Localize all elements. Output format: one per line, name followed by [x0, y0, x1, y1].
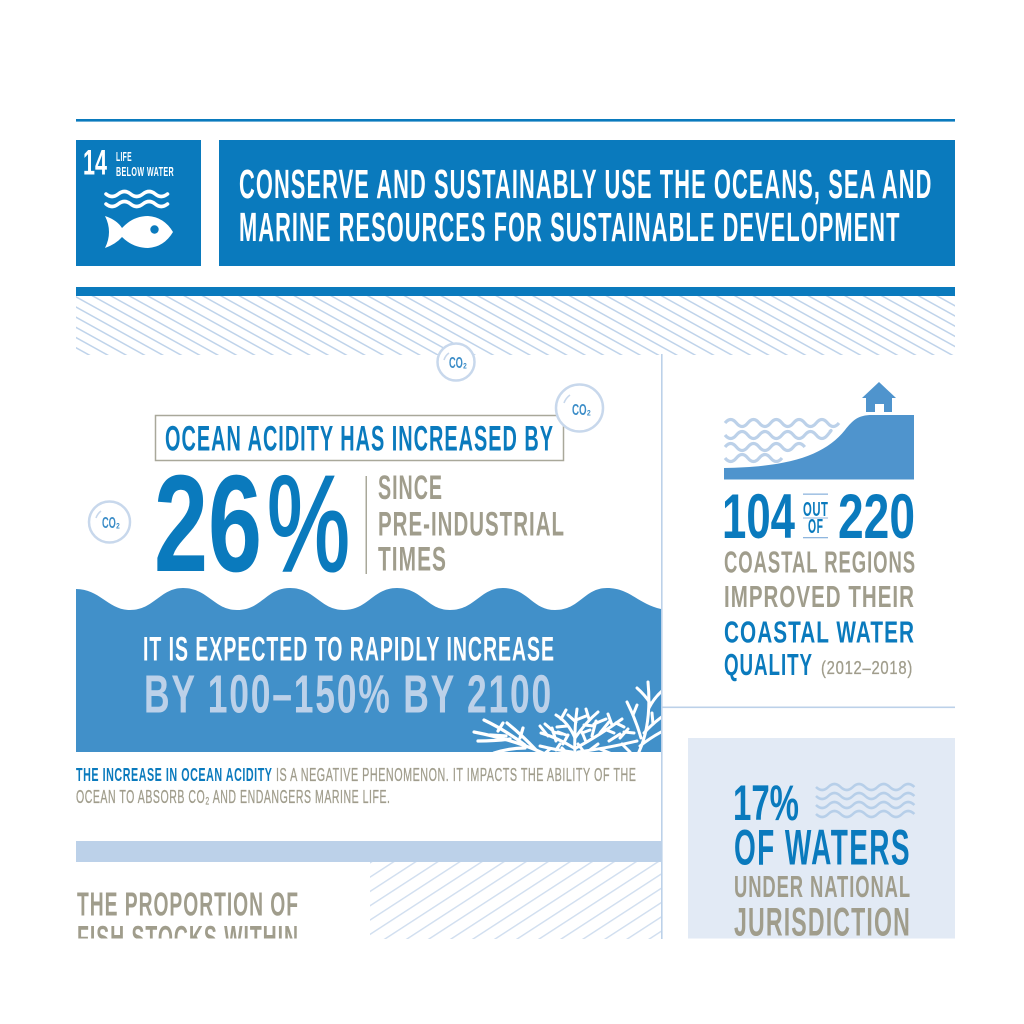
icon: CO2 bubble left — [89, 502, 130, 542]
text block: acidity explanation: OCEAN TO ABSORB CO₂ AND ENDANGERS MARINE LIFE. — [76, 786, 390, 807]
stat: 104 out of 220 — [722, 482, 915, 552]
forecast line 1: IT IS EXPECTED TO RAPIDLY INCREASE — [143, 630, 555, 668]
since pre-industrial times: TIMES — [378, 540, 447, 578]
text block: coastal regions: COASTAL WATER — [724, 614, 915, 650]
stat: 104 out of 220: 104 — [722, 482, 795, 552]
top rule — [76, 119, 955, 122]
text block: acidity explanation: IS A NEGATIVE PHENOMENON. IT IMPACTS THE ABILITY OF THE — [276, 764, 636, 785]
icon: CO2 bubble left: CO₂ — [102, 515, 120, 532]
out of: OF — [808, 516, 824, 538]
icon: fish — [105, 216, 173, 248]
section band — [76, 841, 661, 862]
house — [862, 382, 896, 412]
since pre-industrial times — [378, 469, 565, 578]
big number 26%: 26 — [154, 447, 262, 601]
big number 26%: % — [267, 448, 350, 600]
forecast line 2: BY 100–150% BY 2100 — [144, 664, 553, 724]
heading: fish stocks: FISH STOCKS WITHIN — [77, 919, 299, 956]
icon: CO2 bubble top: CO₂ — [449, 355, 467, 372]
out of — [803, 494, 828, 538]
stat: 17%: 17% — [733, 775, 799, 831]
stat: 104 out of 220: 220 — [838, 482, 915, 552]
goal name: LIFE — [116, 149, 132, 164]
text block: acidity explanation: THE INCREASE IN OCEAN ACIDITY — [76, 764, 272, 785]
out of: OUT — [803, 499, 828, 521]
panel: wave with forecast — [76, 588, 663, 754]
since pre-industrial times: SINCE — [378, 469, 443, 507]
icon: CO2 bubble right — [556, 384, 603, 432]
goal name — [116, 149, 174, 179]
SDG 14 badge — [76, 140, 201, 266]
icon: CO2 bubble top — [438, 344, 474, 380]
text block: coastal regions: IMPROVED THEIR — [724, 579, 915, 614]
icon: CO2 bubble right: CO₂ — [572, 402, 591, 419]
text block: coastal regions: (2012–2018) — [821, 658, 913, 678]
icon: coast and house — [724, 382, 914, 480]
heading: fish stocks: THE PROPORTION OF — [77, 886, 299, 922]
under national jurisdiction: UNDER NATIONAL — [734, 869, 911, 904]
waves — [725, 420, 839, 462]
icon: waves — [106, 192, 168, 206]
heading: fish stocks — [77, 892, 298, 938]
since pre-industrial times: PRE-INDUSTRIAL — [378, 506, 565, 544]
waves — [816, 784, 914, 817]
under national jurisdiction — [734, 869, 911, 944]
callout: acidity heading — [156, 416, 564, 460]
goal number: 14 — [83, 144, 107, 182]
panel: national jurisdiction — [688, 738, 955, 944]
goal name: BELOW WATER — [116, 164, 174, 179]
text block: coastal regions — [724, 544, 916, 682]
text block: acidity explanation — [76, 764, 636, 807]
callout: acidity heading: OCEAN ACIDITY HAS INCREASED BY — [165, 418, 554, 458]
section bar — [76, 287, 955, 296]
icon: coral — [474, 682, 663, 754]
text block: coastal regions: QUALITY — [724, 647, 813, 682]
title banner — [219, 140, 955, 266]
